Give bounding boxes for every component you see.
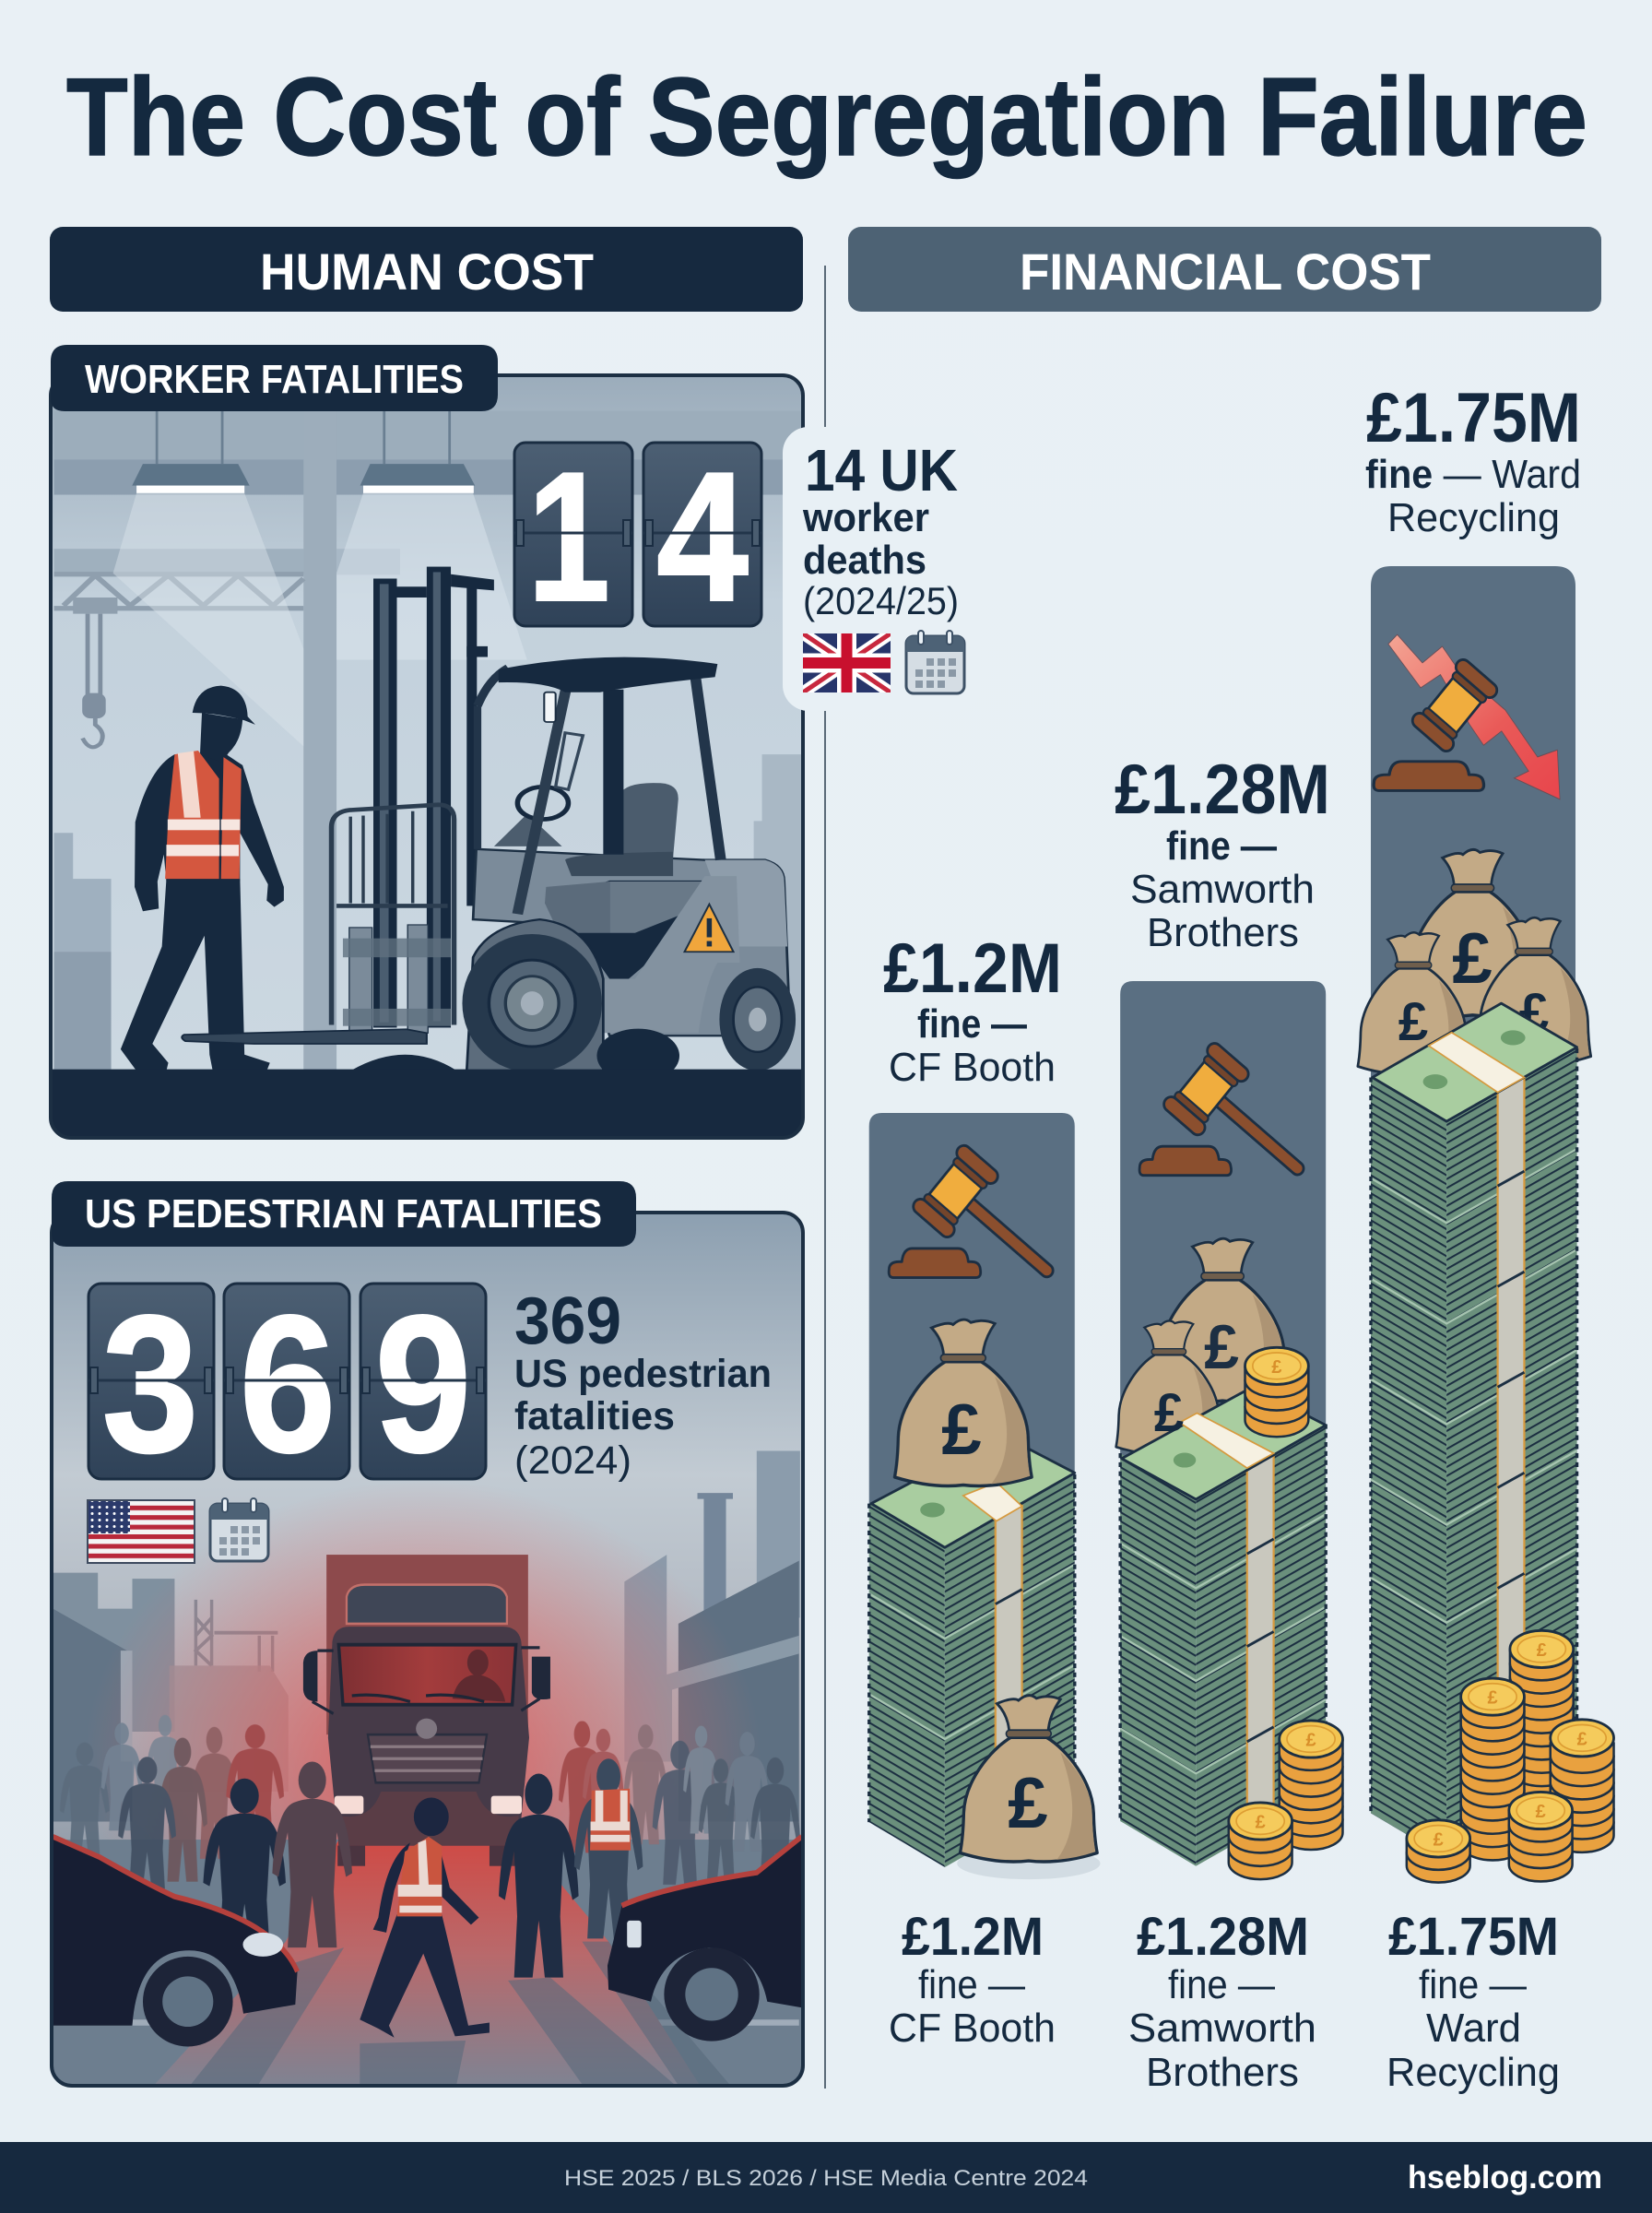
heading: human cost: [50, 227, 803, 312]
icon: crane hook: [73, 598, 117, 747]
walking worker in vest: [360, 1798, 490, 2038]
label: top £1.2M: [883, 929, 1062, 1090]
bar with money stack: [869, 1113, 1101, 1879]
label: top £1.75M: fine — Ward: [1365, 452, 1581, 497]
road: [48, 1840, 809, 2091]
stat text: 369 US pedestrian fatalities: fatalities: [514, 1394, 675, 1438]
bar with money stack: [1116, 981, 1342, 1879]
footer sources: HSE 2025 / BLS 2026 / HSE Media Centre 2024: [564, 2166, 1088, 2191]
icon: gavel: [1139, 1040, 1328, 1205]
label: bottom £1.28M: Samworth: [1128, 2006, 1316, 2051]
icon: coin stacks: £: [1536, 1802, 1546, 1822]
icon: coin stack top: [1245, 1347, 1308, 1437]
icon: money bags: [1358, 849, 1591, 1074]
label: top £1.28M: [1115, 751, 1330, 955]
worker silhouette: [121, 686, 284, 1071]
pound sign large bag: £: [1204, 1312, 1239, 1382]
flip counter: 369: 9: [374, 1274, 472, 1493]
icon: gavel head and base: [1374, 657, 1500, 790]
stack of banknotes: [1371, 1003, 1577, 1858]
label: top £1.2M: fine —: [917, 1001, 1027, 1047]
icon: money bag lower: [957, 1696, 1101, 1879]
callout: 14 UK worker deaths: 14 UK: [805, 437, 958, 503]
callout: 14 UK worker deaths: [783, 427, 981, 711]
forklift: [182, 567, 796, 1083]
bar: [1371, 566, 1575, 1106]
tab label: worker fatalities: [51, 345, 498, 411]
icon: coin stack low: £: [1256, 1812, 1266, 1833]
icon: calendar: [906, 631, 964, 693]
heading: human cost: HUMAN COST: [260, 243, 594, 301]
flip counter: 369: 6: [240, 1274, 336, 1493]
icon: US flag: [88, 1500, 195, 1563]
label: bottom £1.2M: fine —: [918, 1962, 1025, 2007]
label: bottom £1.28M: £1.28M: [1137, 1907, 1309, 1967]
icon: coin stacks: £: [1434, 1829, 1444, 1850]
label: top £1.28M: £1.28M: [1115, 751, 1330, 829]
label: bottom £1.28M: Brothers: [1146, 2050, 1299, 2095]
icon: coin stacks: £: [1537, 1640, 1548, 1661]
icon: coin stacks: £: [1577, 1729, 1587, 1749]
label: top £1.2M: £1.2M: [883, 929, 1062, 1008]
label: top £1.75M: £1.75M: [1366, 379, 1581, 457]
stack of banknotes: [1120, 1387, 1326, 1866]
flip counter: 369: [88, 1274, 486, 1493]
label: top £1.28M: Brothers: [1147, 910, 1299, 955]
callout: 14 UK worker deaths: worker: [802, 495, 929, 540]
pound signs on bags: £: [1519, 983, 1549, 1043]
right car: [608, 1837, 802, 2041]
icon: coin stacks: [1407, 1630, 1614, 1883]
icon: coin stack top: £: [1271, 1357, 1282, 1378]
tab label: US pedestrian fatalities: US PEDESTRIAN FATALITIES: [85, 1191, 602, 1237]
stack of banknotes: [869, 1435, 1075, 1867]
icon: coin stack low: £: [1306, 1730, 1316, 1751]
callout: 14 UK worker deaths: deaths: [803, 538, 926, 583]
label: bottom £1.2M: [889, 1907, 1056, 2051]
illustration: truck and pedestrians: [48, 1210, 809, 2091]
label: top £1.28M: fine —: [1166, 823, 1277, 869]
background crowd: [60, 1715, 800, 1889]
tab label: US pedestrian fatalities: [52, 1181, 636, 1247]
icon: coin stacks: £: [1487, 1687, 1498, 1709]
stat text: 369 US pedestrian fatalities: 369: [514, 1284, 621, 1358]
flip counter: 14: 4: [656, 434, 749, 640]
footer bar: [0, 2142, 1652, 2213]
pound signs on bags: £: [1398, 992, 1428, 1052]
pound sign lower: £: [1008, 1762, 1048, 1843]
stat text: 369 US pedestrian fatalities: (2024): [514, 1438, 631, 1483]
floor: [53, 1070, 801, 1136]
label: top £1.2M: CF Booth: [889, 1045, 1056, 1090]
truck: [303, 1555, 550, 1866]
column: £1.2M CF Booth: [869, 929, 1101, 2051]
label: bottom £1.75M: Ward: [1426, 2006, 1521, 2051]
column: £1.75M Ward Recycling: [1358, 379, 1614, 2095]
flip counter: 369: 3: [101, 1274, 199, 1493]
panel: US pedestrian fatalities: [48, 1181, 809, 2091]
icon: calendar: [210, 1498, 268, 1561]
pound sign small bag: £: [1154, 1383, 1184, 1443]
illustration: warehouse forklift scene: [38, 368, 825, 1161]
stat text: 369 US pedestrian fatalities: [514, 1284, 772, 1483]
callout: 14 UK worker deaths: (2024/25): [803, 579, 959, 622]
label: bottom £1.75M: [1386, 1907, 1560, 2095]
heading: financial cost: FINANCIAL COST: [1020, 243, 1431, 301]
label: bottom £1.28M: fine —: [1168, 1962, 1275, 2007]
foreground pedestrians: [203, 1758, 643, 1978]
left car: [53, 1837, 298, 2046]
flip counter: 14: [514, 434, 761, 640]
icon: UK flag: [803, 633, 891, 692]
footer site: hseblog.com: [1408, 2160, 1602, 2195]
icon: money bag upper: [894, 1320, 1032, 1485]
pound signs on bags: [1398, 917, 1549, 1052]
icon: falling arrow: [1388, 634, 1560, 799]
label: top £1.75M: Recycling: [1387, 495, 1560, 540]
icon: money bags: [1116, 1238, 1288, 1454]
pound sign upper: £: [941, 1389, 982, 1470]
tab label: worker fatalities: WORKER FATALITIES: [85, 357, 464, 402]
heading: financial cost: [848, 227, 1601, 312]
icon: gavel: [889, 1142, 1078, 1308]
flip counter: 14: 1: [527, 434, 610, 640]
bar with money stack: [1358, 566, 1614, 1883]
stat text: 369 US pedestrian fatalities: US pedestrian: [514, 1352, 772, 1396]
label: bottom £1.75M: £1.75M: [1388, 1907, 1559, 1967]
label: bottom £1.75M: fine —: [1419, 1962, 1527, 2007]
column: £1.28M Samworth Brothers: [1115, 751, 1342, 2095]
label: bottom £1.2M: CF Booth: [889, 2006, 1056, 2051]
label: top £1.28M: Samworth: [1130, 867, 1315, 912]
label: bottom £1.28M: [1128, 1907, 1316, 2095]
label: bottom £1.2M: £1.2M: [902, 1907, 1044, 1967]
panel: worker fatalities: [38, 345, 825, 1161]
icon: coin stack low: [1229, 1721, 1342, 1879]
label: top £1.75M: [1365, 379, 1581, 540]
label: bottom £1.75M: Recycling: [1386, 2050, 1560, 2095]
pound signs on bags: £: [1452, 917, 1493, 999]
